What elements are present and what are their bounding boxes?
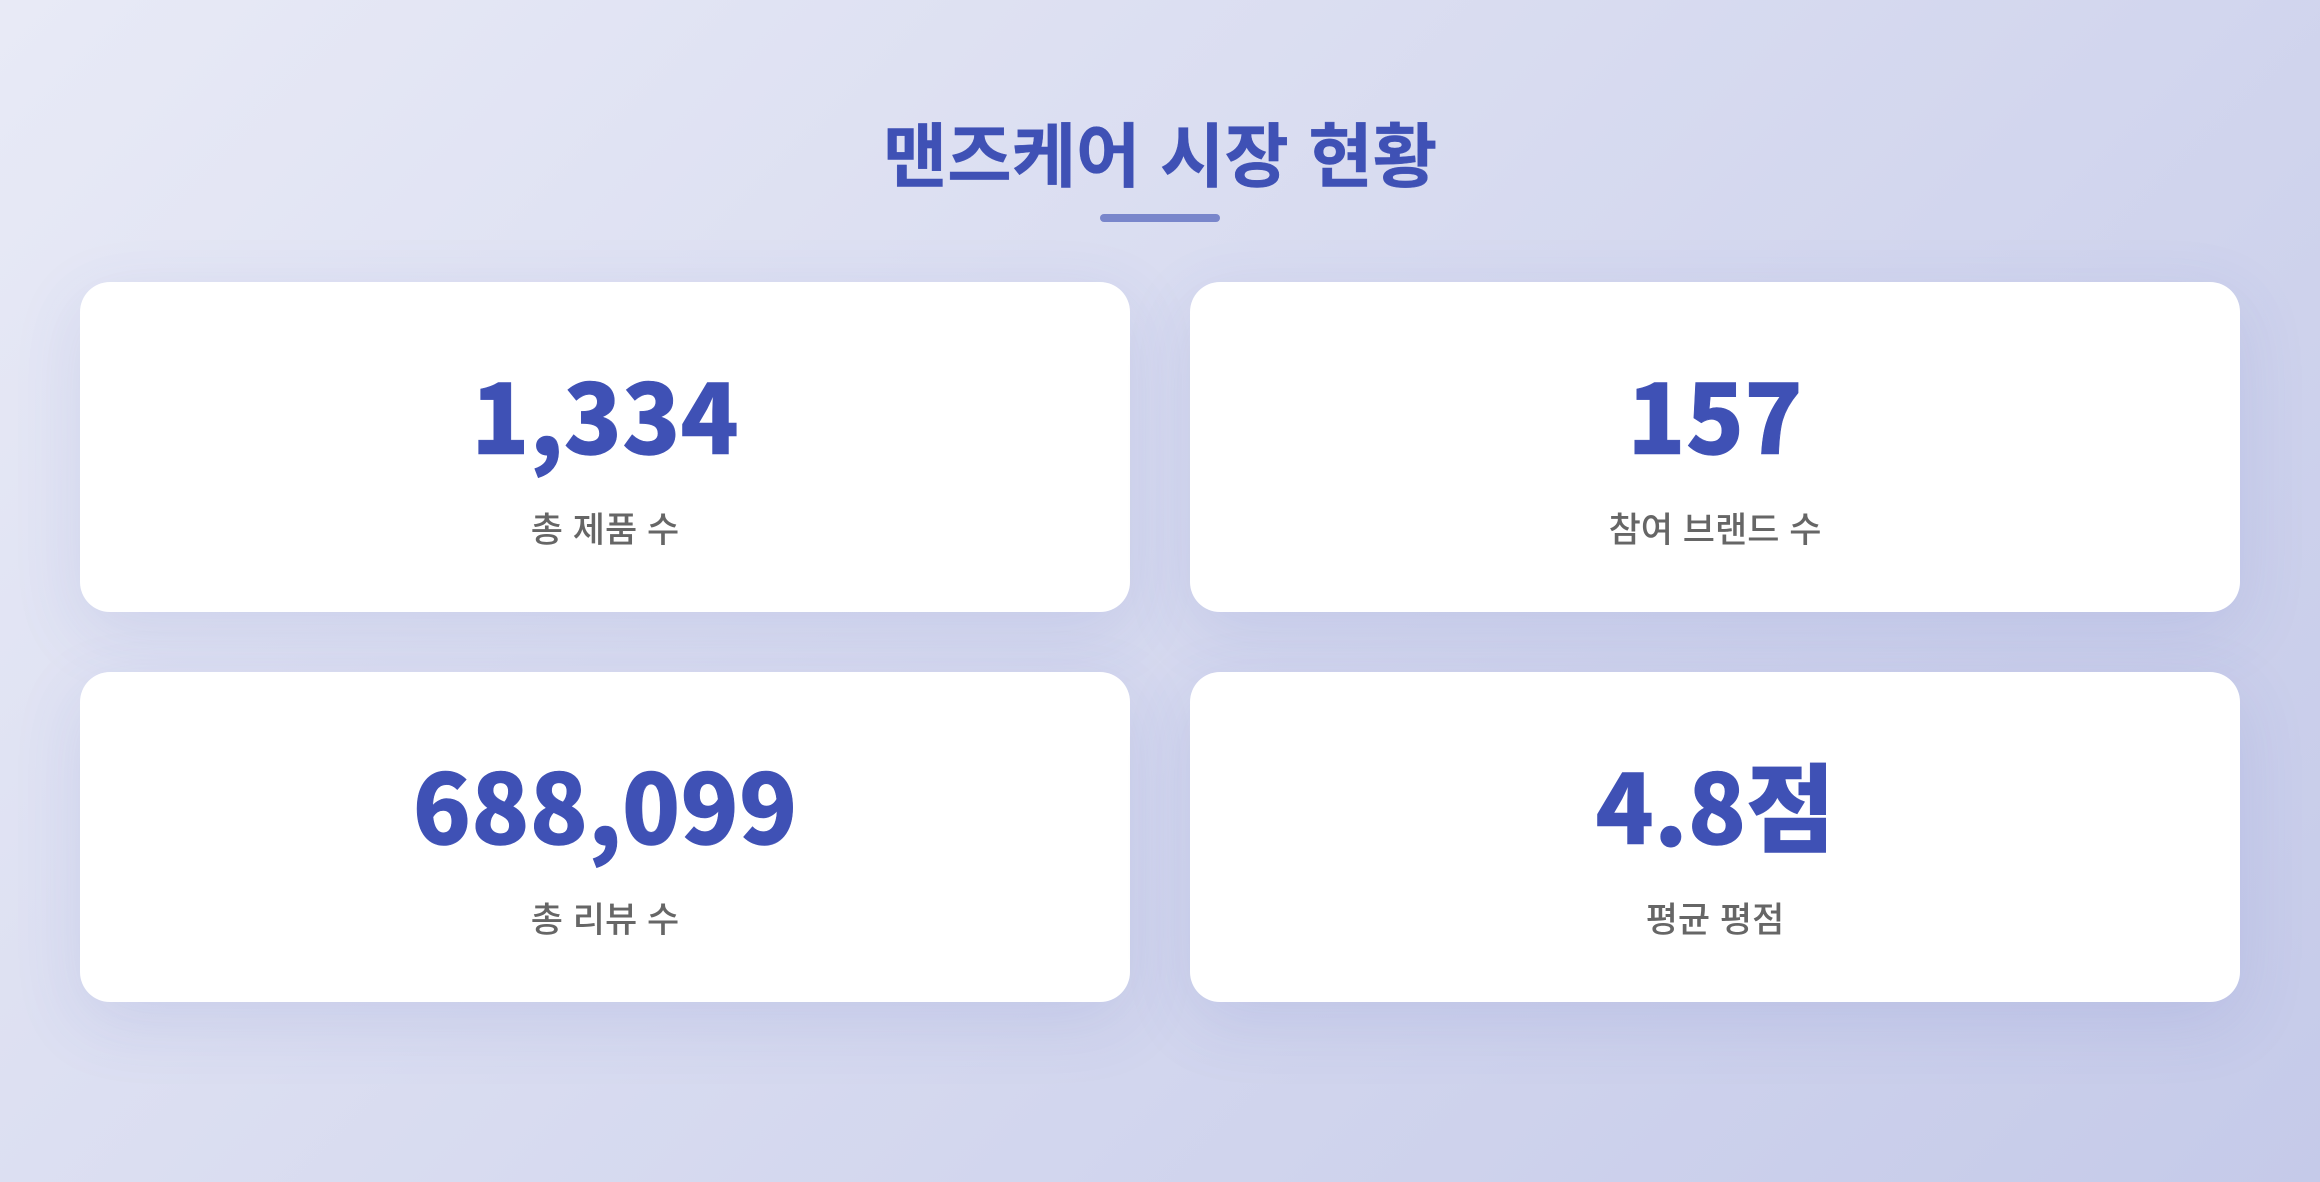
- panel: total products: [80, 282, 1130, 612]
- stat label: average rating: 평균 평점: [1646, 892, 1784, 943]
- panel: total reviews: [80, 672, 1130, 1002]
- stat label: total products: 총 제품 수: [531, 502, 679, 553]
- stat label: total reviews: 총 리뷰 수: [531, 892, 679, 943]
- stat value: average rating: 4.8점: [1595, 733, 1835, 872]
- panel: participating brands: [1190, 282, 2240, 612]
- title: 맨즈케어 시장 현황: [883, 101, 1437, 202]
- stat label: participating brands: 참여 브랜드 수: [1609, 502, 1821, 553]
- panel: average rating: [1190, 672, 2240, 1002]
- stat value: total reviews: 688,099: [413, 733, 797, 872]
- title underline: [1100, 214, 1220, 222]
- stat value: total products: 1,334: [471, 343, 739, 482]
- stat value: participating brands: 157: [1627, 343, 1803, 482]
